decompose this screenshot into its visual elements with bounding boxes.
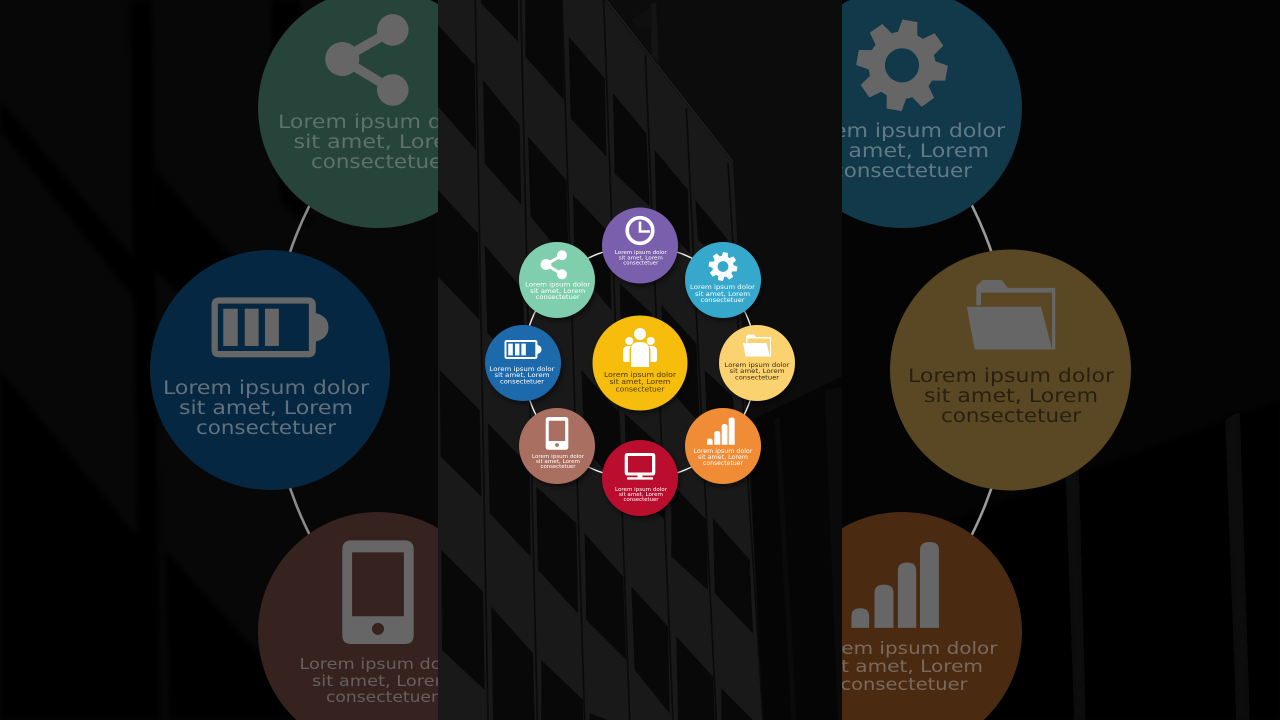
circle: gear, teal: sit amet, Lorem — [695, 291, 750, 298]
ring connector: left — [288, 206, 310, 534]
circle: bars, orange: consectetuer — [703, 461, 744, 467]
panel: right blurred backdrop — [842, 0, 1131, 720]
circle: gear, teal: Lorem ipsum dolor — [690, 284, 756, 291]
circle: phone, left: consectetuer — [326, 688, 439, 706]
centre circle: people, yellow: sit amet, Lorem — [610, 378, 671, 386]
circle: folder, pale yellow: Lorem ipsum dolor — [724, 362, 790, 369]
circle: gear, right: Lorem ipsum dolor — [799, 121, 1005, 142]
circle: phone, brown: sit amet, Lorem — [536, 459, 580, 465]
circle: battery, left: sit amet, Lorem — [179, 398, 353, 419]
circle: folder, pale yellow: consectetuer — [735, 375, 779, 382]
circle: share, green: sit amet, Lorem — [530, 288, 585, 295]
circle: clock, purple: Lorem ipsum dolor — [615, 250, 668, 256]
circle: phone, left — [258, 512, 438, 720]
circle: phone, brown: consectetuer — [540, 464, 576, 470]
circle: clock, purple: consectetuer — [623, 261, 659, 267]
circle: battery, blue: consectetuer — [500, 379, 544, 386]
circle: phone, left: Lorem ipsum dolor — [300, 655, 465, 673]
ring connector: centre — [524, 246, 756, 479]
circle: folder, right: sit amet, Lorem — [924, 386, 1098, 407]
circle: bars, right: sit amet, Lorem — [825, 657, 983, 677]
circle: phone, brown: Lorem ipsum dolor — [532, 454, 585, 460]
circle: folder, pale yellow — [719, 325, 795, 401]
circle: folder, right: Lorem ipsum dolor — [908, 366, 1114, 387]
circle: folder, pale yellow: sit amet, Lorem — [730, 368, 784, 375]
panel: left blurred backdrop — [150, 0, 438, 720]
circle: bars, right: Lorem ipsum dolor — [810, 639, 998, 659]
circle: clock, purple: sit amet, Lorem — [619, 255, 663, 261]
circle: folder, right: consectetuer — [941, 406, 1081, 427]
circle: battery, blue: sit amet, Lorem — [494, 372, 550, 379]
circle: share, left: Lorem ipsum dolor — [278, 112, 484, 133]
ring connector: right — [970, 204, 992, 536]
circle: battery, blue: Lorem ipsum dolor — [490, 366, 555, 373]
centre circle: people, yellow: Lorem ipsum dolor — [604, 371, 676, 379]
circle: battery, left — [150, 250, 390, 490]
panel: centre building photo background — [438, 0, 762, 720]
centre circle: people, yellow: consectetuer — [616, 386, 665, 394]
circle: battery, left: Lorem ipsum dolor — [163, 378, 369, 399]
circle: bars, orange — [685, 408, 761, 484]
circle: phone, left: sit amet, Lorem — [312, 672, 452, 690]
circle: phone, brown — [519, 408, 595, 484]
circle: clock, purple — [602, 208, 678, 284]
circle: monitor, red — [602, 440, 678, 516]
circle: share, left: consectetuer — [311, 152, 451, 173]
circle: bars, orange: sit amet, Lorem — [698, 455, 748, 461]
circle: battery, blue — [485, 325, 561, 401]
circle: share, green — [519, 242, 595, 318]
circle: share, green: consectetuer — [536, 294, 580, 301]
circle: battery, left: consectetuer — [196, 418, 336, 439]
circle: gear, right — [842, 0, 1022, 228]
circle: gear, teal: consectetuer — [700, 297, 745, 304]
circle: gear, right: consectetuer — [832, 161, 972, 182]
circle: gear, right: sit amet, Lorem — [815, 141, 989, 162]
circle: bars, orange: Lorem ipsum dolor — [694, 449, 753, 455]
circle: monitor, red: consectetuer — [624, 497, 659, 503]
circle: share, left — [258, 0, 438, 228]
circle: monitor, red: sit amet, Lorem — [619, 492, 663, 498]
circle: share, green: Lorem ipsum dolor — [525, 282, 591, 288]
circle: share, left: sit amet, Lorem — [294, 132, 468, 153]
circle: bars, right — [842, 512, 1022, 720]
circle: folder, right — [890, 250, 1131, 490]
circle: gear, teal — [685, 242, 761, 318]
circle: bars, right: consectetuer — [840, 675, 968, 695]
centre circle: people, yellow — [592, 316, 688, 410]
circle: monitor, red: Lorem ipsum dolor — [615, 487, 668, 493]
